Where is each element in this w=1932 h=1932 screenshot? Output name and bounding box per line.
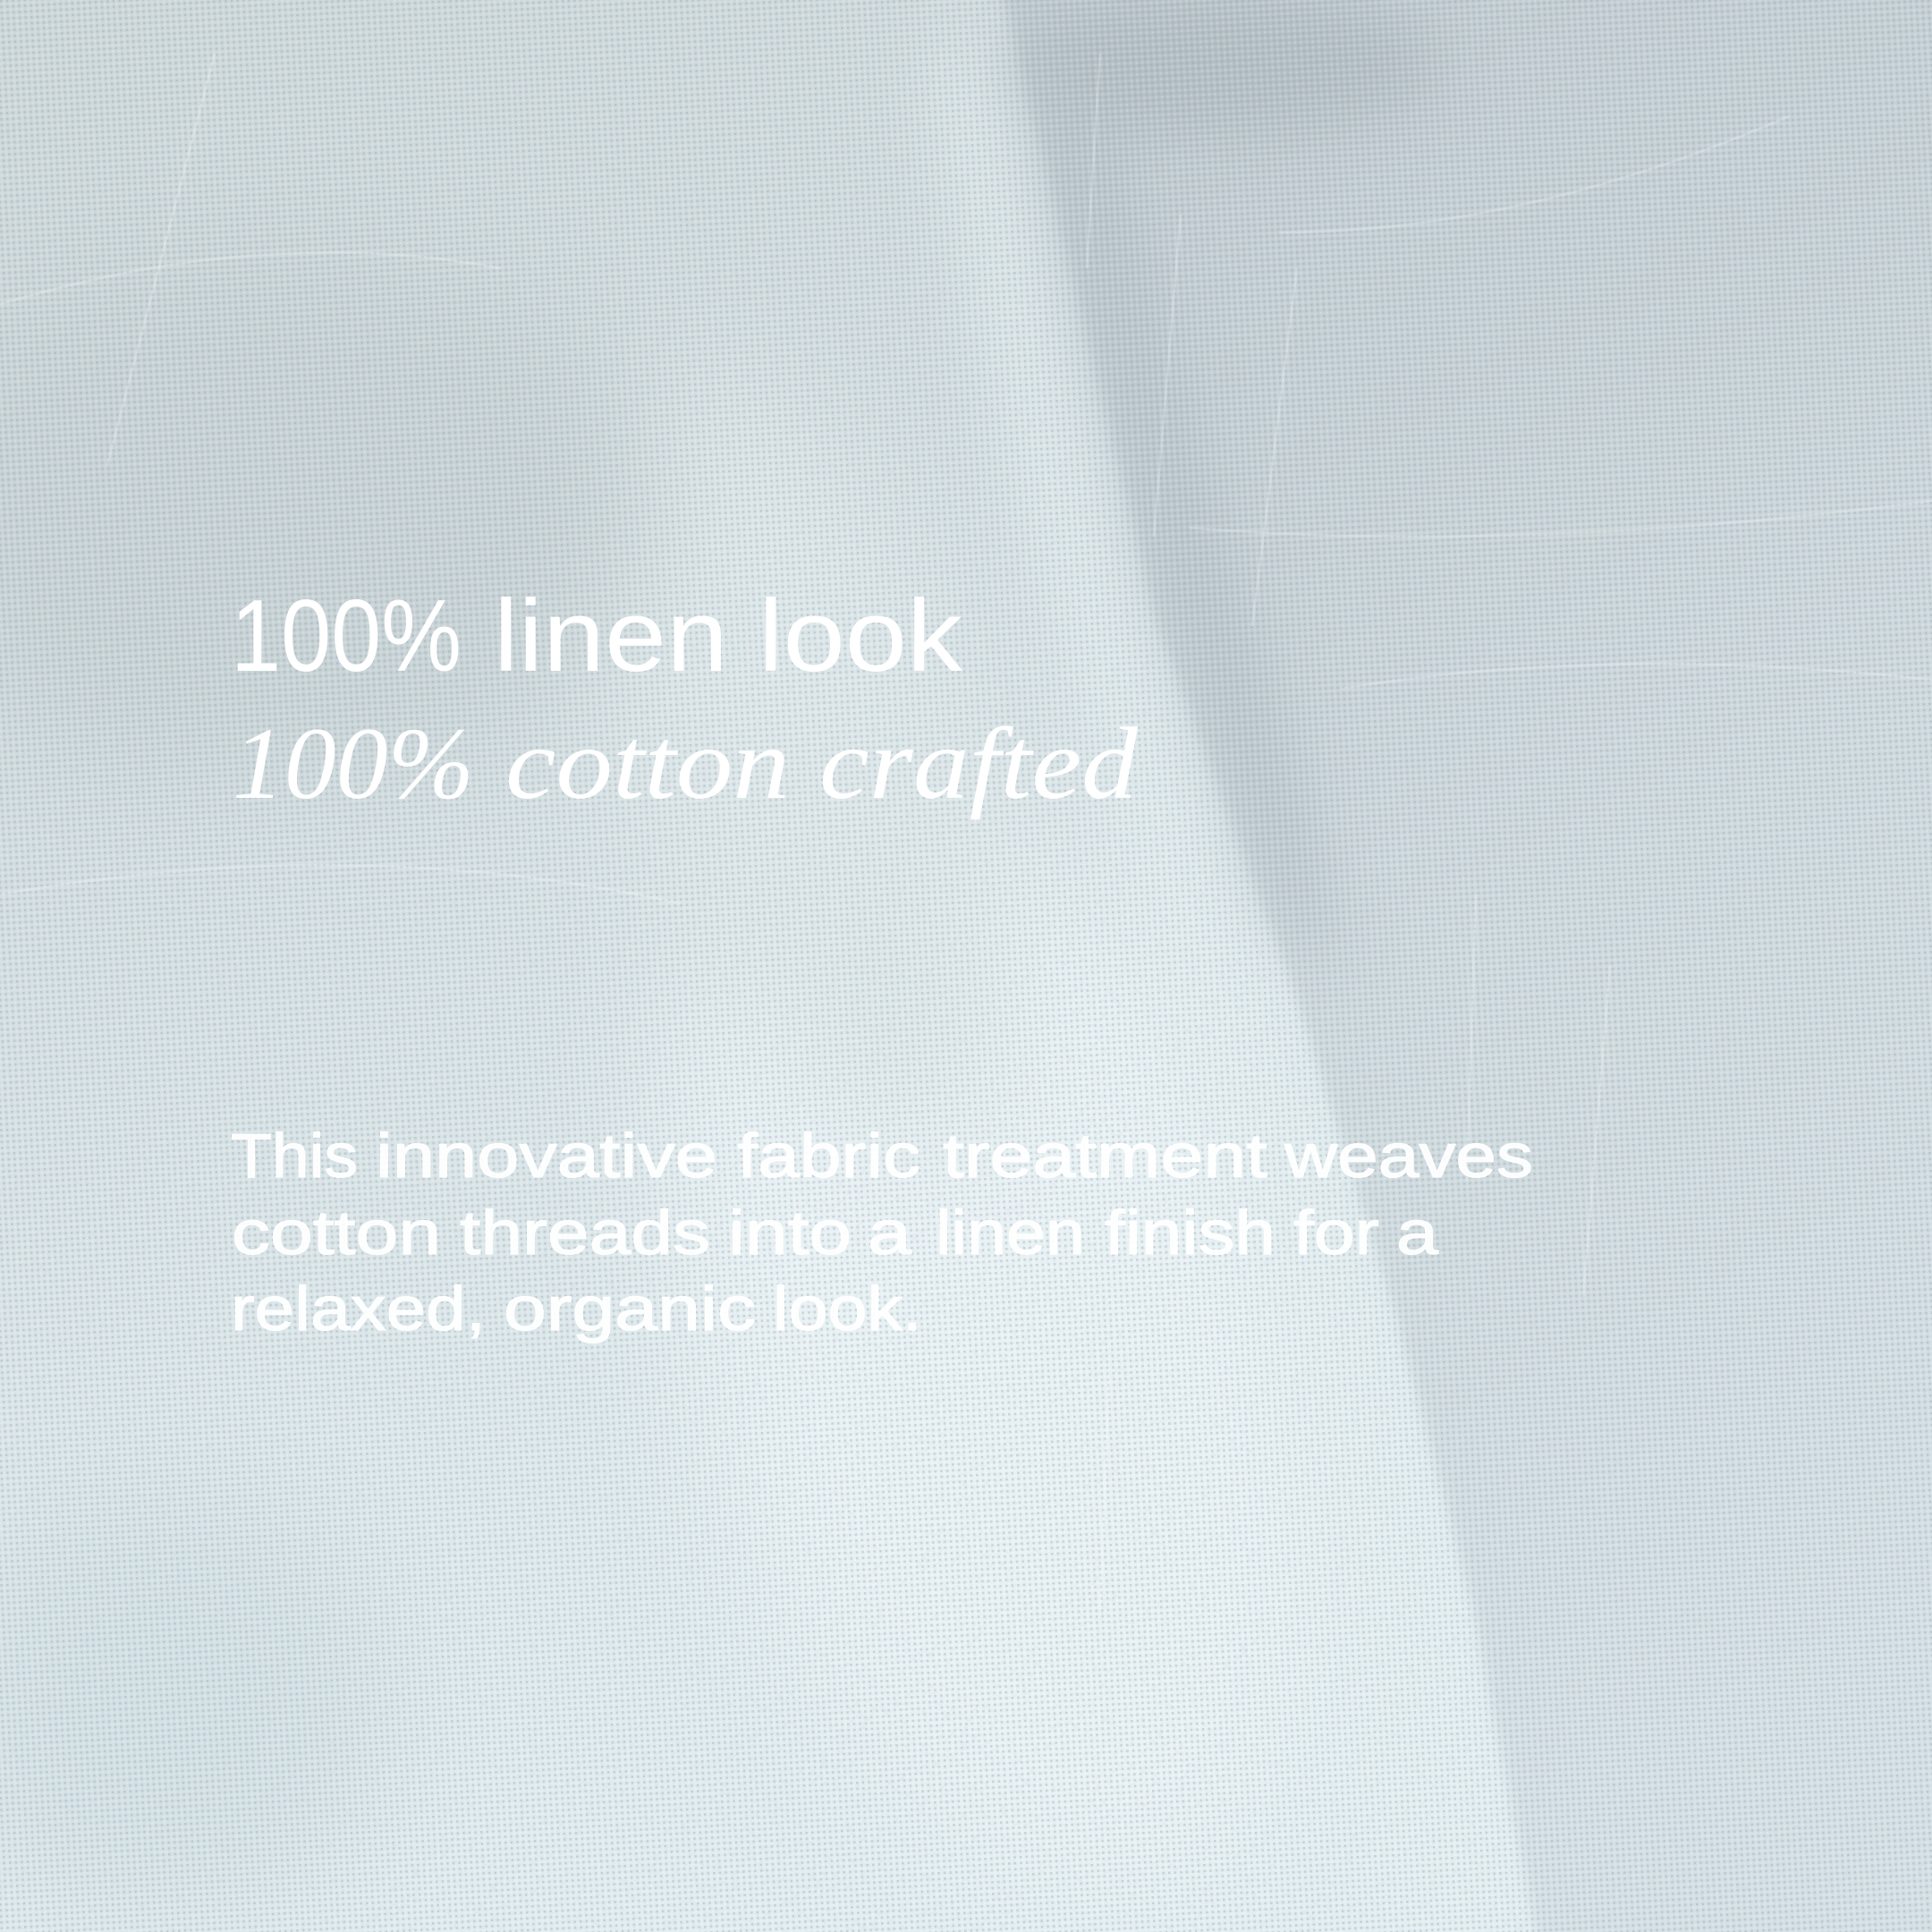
body text: weaves xyxy=(1284,1121,1533,1191)
fold shadows xyxy=(1011,0,1440,984)
body text: fabric xyxy=(737,1121,920,1191)
body text: finish xyxy=(1105,1198,1275,1267)
body text: This xyxy=(231,1121,358,1191)
body text xyxy=(231,1121,1533,1343)
body text: a xyxy=(1396,1198,1438,1267)
heading line: linen look: linen xyxy=(494,580,728,693)
heading line: cotton crafted: cotton xyxy=(505,707,790,820)
body text: a xyxy=(868,1198,911,1267)
body text: look. xyxy=(773,1274,922,1343)
body text: relaxed, xyxy=(231,1274,486,1343)
body text: for xyxy=(1293,1198,1379,1267)
fold highlight along ridge xyxy=(930,0,1521,1932)
body text: organic xyxy=(504,1274,756,1343)
body text: cotton xyxy=(232,1198,441,1267)
title xyxy=(231,580,1139,820)
body text: linen xyxy=(936,1198,1085,1267)
heading line: linen look xyxy=(231,580,963,693)
body text: threads xyxy=(460,1198,710,1267)
heading line: linen look: 100% xyxy=(231,580,462,693)
heading line: linen look: look xyxy=(758,580,963,693)
body text: treatment xyxy=(943,1121,1267,1191)
right fabric panel behind fold xyxy=(996,0,1932,1932)
heading line: cotton crafted: crafted xyxy=(819,707,1139,820)
body text: into xyxy=(728,1198,852,1267)
body text: innovative xyxy=(376,1121,717,1191)
heading line: cotton crafted xyxy=(233,707,1139,820)
heading line: cotton crafted: 100% xyxy=(233,707,474,820)
